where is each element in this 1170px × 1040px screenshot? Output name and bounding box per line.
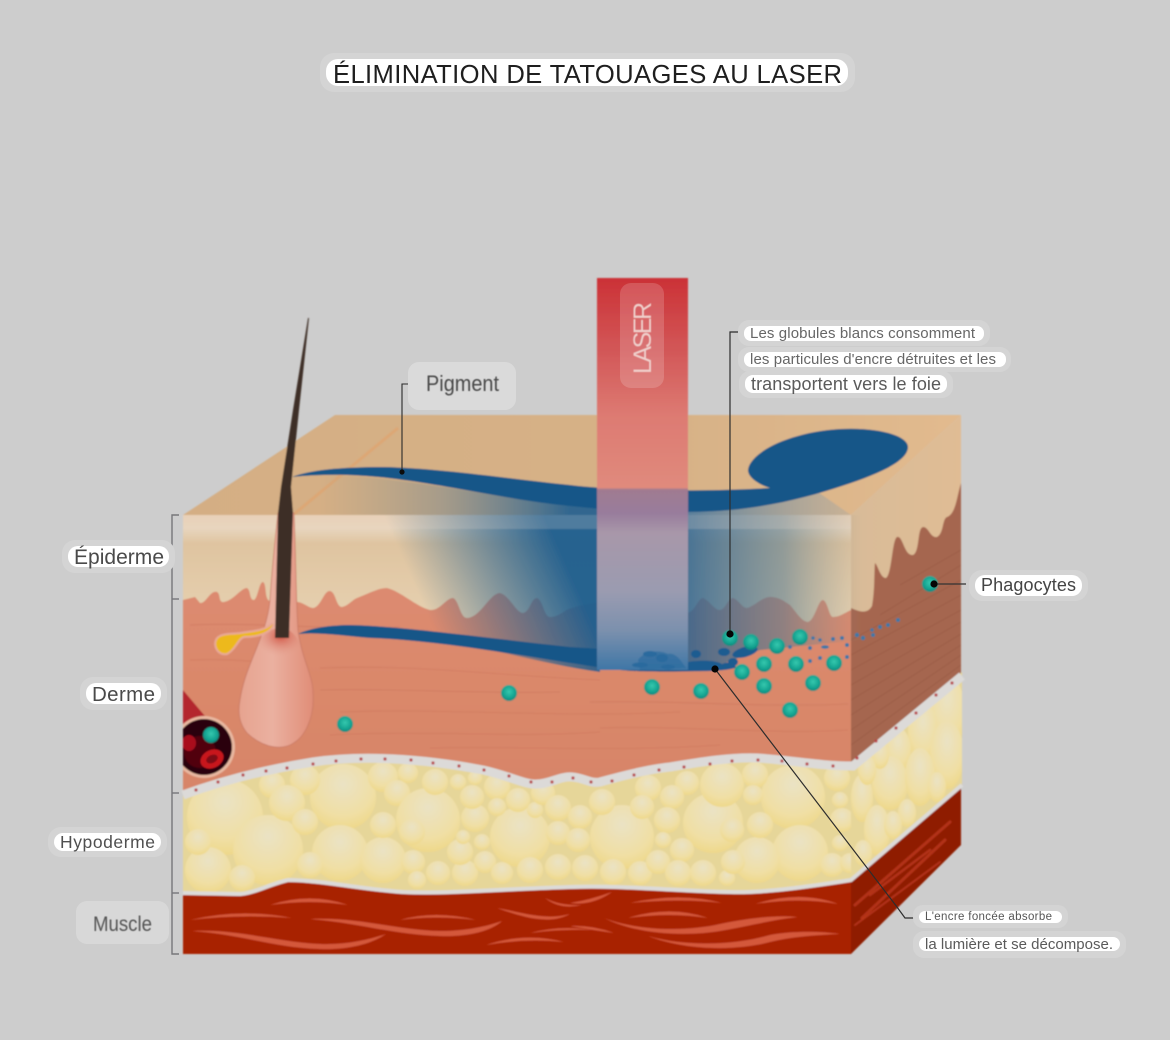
top surface of skin	[183, 415, 961, 515]
lower ink band	[298, 625, 703, 672]
label: Pigment	[408, 362, 516, 410]
label: white blood cells text	[738, 320, 1011, 398]
grey blue surface shading right of beam	[688, 490, 851, 515]
blood vessel	[182, 690, 236, 779]
label: Hypoderme: Hypoderme	[60, 832, 155, 852]
label: white blood cells text: transportent vers le foie	[751, 374, 941, 394]
skin cross-section illustration	[173, 278, 965, 954]
label: Épiderme	[62, 540, 175, 573]
hair follicle	[239, 513, 313, 747]
fat layer front	[182, 762, 852, 892]
label: Pigment: Pigment	[426, 371, 499, 396]
ink diffusion left of beam	[330, 515, 600, 672]
label: Phagocytes	[969, 570, 1088, 601]
ink diffusion right of beam	[688, 515, 862, 671]
epidermis light stripe	[183, 515, 851, 529]
fat layer right side	[851, 670, 965, 885]
muscle right side	[851, 787, 961, 954]
label: Muscle: Muscle	[93, 913, 152, 936]
leader line: Phagocytes	[930, 580, 966, 588]
dermis texture lines	[190, 624, 848, 749]
right face texture lines	[851, 550, 961, 745]
label: Épiderme: Épiderme	[74, 546, 164, 569]
label: laser	[620, 283, 664, 388]
blue shading under top surface	[292, 476, 600, 515]
layer bracket	[172, 515, 179, 954]
phagocyte cells	[337, 576, 938, 732]
leader line: globules blancs	[726, 332, 745, 638]
leader line: encre foncée	[711, 665, 919, 918]
title: ÉLIMINATION DE TATOUAGES AU LASER	[333, 60, 842, 89]
label: white blood cells text: Les globules blancs consomment	[750, 325, 976, 342]
label: Derme	[80, 677, 167, 710]
muscle fibres	[190, 822, 950, 949]
leader line: Pigment	[399, 384, 425, 475]
follicle redness	[252, 628, 304, 669]
muscle front	[183, 882, 851, 954]
membrane red dots	[194, 681, 954, 792]
broken ink fragments	[632, 644, 759, 671]
label: Hypoderme	[48, 827, 167, 857]
label: Phagocytes: Phagocytes	[981, 575, 1076, 595]
laser beam	[597, 278, 688, 670]
right face of skin	[851, 415, 961, 790]
label: white blood cells text: les particules d'encre détruites et les	[750, 351, 996, 368]
infographic canvas	[54, 59, 1120, 955]
dermis front	[183, 582, 851, 795]
label: dark ink text: la lumière et se décompose.	[925, 936, 1113, 953]
label: laser: LASER	[629, 302, 657, 374]
lower membrane	[183, 785, 962, 894]
sebaceous gland	[216, 624, 273, 653]
label: Derme: Derme	[92, 683, 155, 706]
right face dermis	[851, 483, 961, 770]
label: dark ink text: L'encre foncée absorbe	[925, 911, 1052, 923]
upper membrane	[183, 676, 962, 795]
title	[320, 53, 855, 92]
epidermis front	[183, 515, 851, 625]
hair shaft	[275, 318, 309, 638]
label: Muscle	[76, 901, 169, 944]
label: dark ink text	[913, 905, 1126, 958]
upper ink band with blob	[292, 429, 908, 512]
ink particles drifting to the right	[788, 618, 900, 663]
skin crease	[293, 428, 398, 515]
